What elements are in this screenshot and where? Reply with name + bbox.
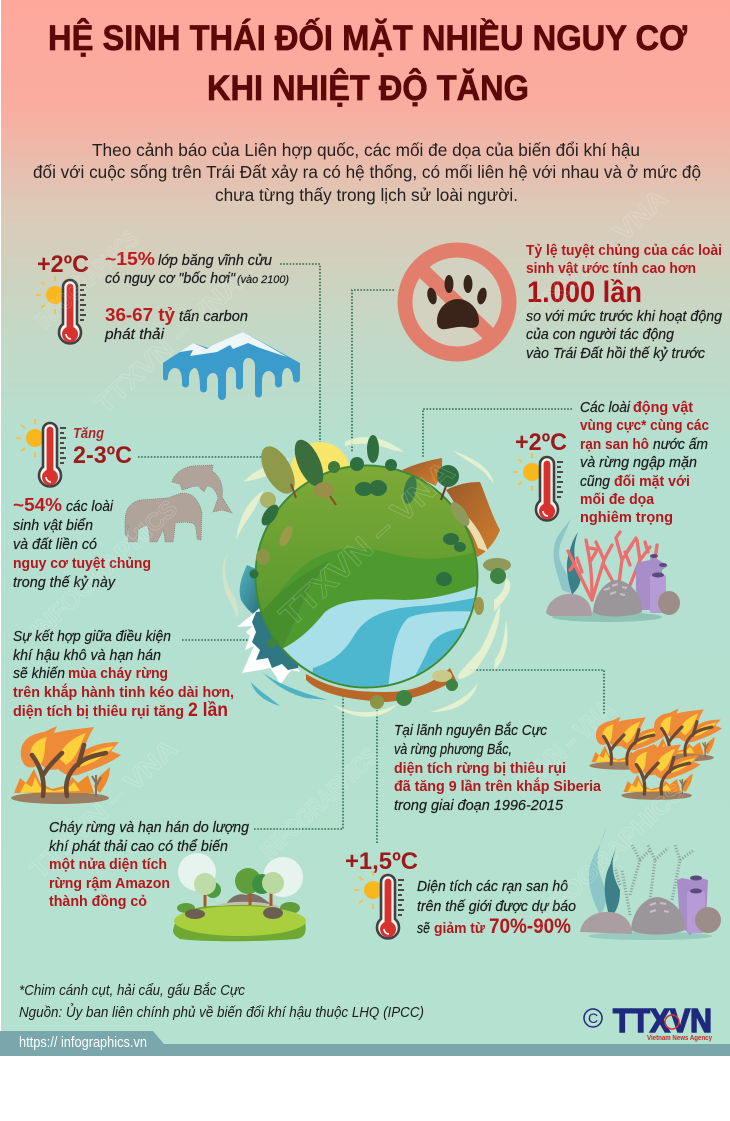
text: extinction rate: của con người tác động: [526, 327, 674, 343]
connector lines: [138, 264, 604, 843]
panel: species loss: [13, 419, 232, 591]
watermarks: TTXVN – VNA: [504, 694, 619, 804]
text: species loss: các loài: [66, 499, 114, 515]
heading: 2-3°C: Tăng: [73, 425, 104, 442]
text: polar species: nghiêm trọng: [580, 510, 673, 526]
panel: extinction rate: [405, 243, 722, 362]
text: Siberia: đã tăng 9 lần trên khắp Siberia: [394, 777, 602, 795]
panel: fire season: [11, 629, 234, 804]
heading: +1,5°C: +1,5ºC: [345, 848, 418, 875]
icon: thermometer: [36, 276, 86, 343]
watermarks: TTXVN – VNA: [272, 453, 461, 633]
text: species loss: ~54%: [13, 495, 62, 515]
text: extinction rate: so với mức trước khi hoạt động: [526, 309, 722, 325]
intro text: đối với cuộc sống trên Trái Đất xảy ra có hệ thống, có mối liên hệ với nhau và ở mức độ: [33, 162, 701, 182]
intro text: chưa từng thấy trong lịch sử loài người.: [215, 185, 518, 205]
illustration: coral reef: [546, 517, 680, 622]
icon: elephant: [125, 493, 202, 542]
title: [48, 18, 687, 108]
watermarks: TTXVN – VNA: [514, 183, 673, 334]
text: permafrost: [104, 249, 289, 343]
illustration: burning forest: [589, 709, 722, 800]
logo: TTXVN: [584, 1002, 712, 1042]
panel: coral decline: [345, 828, 721, 940]
text: Amazon: [49, 820, 249, 910]
heading: 2-3°C: [73, 425, 132, 469]
source: Nguồn: Ủy ban liên chính phủ về biến đổi khí hậu thuộc LHQ (IPCC): [19, 1003, 424, 1021]
watermarks: INFOGRAPHICS: [31, 226, 144, 334]
panel: Amazon: [49, 820, 306, 941]
text: coral decline: [417, 879, 576, 938]
text: species loss: trong thế kỷ này: [13, 575, 116, 591]
text: permafrost: (vào 2100): [237, 274, 289, 286]
cream swirls: [223, 437, 510, 717]
text: fire season: khí hậu khô và hạn hán: [13, 648, 161, 664]
text: extinction rate: vào Trái Đất hồi thế kỷ trước: [526, 346, 706, 362]
logo: TTXVN: TTXVN: [613, 1002, 712, 1039]
icon: dolphin: [172, 465, 232, 513]
icon: no-animal sign: [405, 250, 509, 354]
text: coral decline: Diện tích các rạn san hô: [417, 879, 568, 895]
intro text: Theo cảnh báo của Liên hợp quốc, các mối đe dọa của biến đổi khí hậu: [92, 140, 640, 160]
text: permafrost: tấn carbon: [179, 309, 248, 325]
text: permafrost: có nguy cơ "bốc hơi": [105, 271, 236, 287]
text: Siberia: [394, 722, 602, 814]
trees and shrubs: [250, 435, 511, 709]
footer bar: [0, 1031, 730, 1056]
text: species loss: nguy cơ tuyệt chủng: [13, 556, 151, 572]
text: extinction rate: Tỷ lệ tuyệt chủng của các loài: [526, 243, 722, 259]
text: Amazon: rừng rậm Amazon: [49, 876, 170, 892]
mountains: [402, 458, 500, 557]
text: fire season: [13, 629, 234, 721]
icon: melting mountain: [163, 332, 300, 400]
text: polar species: [580, 400, 709, 526]
watermarks: [24, 183, 690, 934]
icon: thermometer: [16, 419, 66, 486]
icon: thermometer: [513, 453, 563, 520]
text: polar species: Các loài: [580, 400, 631, 416]
text: fire season: diện tích bị thiêu rụi tăng: [13, 704, 184, 720]
text: fire season: Sự kết hợp giữa điều kiện: [13, 629, 171, 645]
text: polar species: cũng: [580, 474, 610, 490]
text: permafrost: 36-67 tỷ: [105, 305, 175, 325]
text: polar species: đối mặt với: [614, 474, 690, 490]
text: Amazon: Cháy rừng và hạn hán do lượng: [49, 820, 249, 836]
watermarks: TTXVN – VNA: [24, 733, 183, 884]
footnote: *Chim cánh cụt, hải cẩu, gấu Bắc Cực: [19, 982, 245, 999]
text: polar species: rạn san hô: [580, 437, 649, 453]
text: extinction rate: 1.000 lần: [527, 276, 642, 309]
text: permafrost: lớp băng vĩnh cửu: [158, 253, 272, 269]
text: species loss: và đất liền có: [13, 537, 97, 553]
intro text: [33, 140, 701, 205]
panel: permafrost: [36, 249, 300, 400]
panel: Siberia: [394, 709, 722, 814]
text: permafrost: ~15%: [105, 249, 155, 269]
text: fire season: mùa cháy rừng: [68, 666, 168, 682]
heading: 2-3°C: 2-3ºC: [73, 442, 132, 469]
text: fire season: 2 lần: [188, 700, 228, 721]
illustration: burning trees: [11, 726, 121, 804]
text: permafrost: phát thải: [104, 327, 165, 343]
planet surface: [256, 466, 476, 686]
illustration: globe: [223, 435, 511, 717]
text: polar species: mối đe dọa: [580, 492, 655, 508]
illustration: bleached coral: [580, 828, 721, 940]
watermarks: INFOGRAPHICS: [256, 742, 384, 864]
text: Siberia: Tại lãnh nguyên Bắc Cực: [394, 722, 548, 739]
text: Amazon: một nửa diện tích: [49, 857, 167, 873]
text: Siberia: diện tích rừng bị thiêu rụi: [394, 761, 566, 777]
watermarks: INFOGRAPHICS: [26, 495, 183, 644]
watermarks: INFOGRAPHICS: [526, 778, 690, 934]
text: coral decline: sẽ: [417, 921, 430, 937]
text: coral decline: trên thế giới được dự báo: [417, 899, 576, 915]
text: polar species: vùng cực* cùng các: [580, 418, 709, 434]
text: extinction rate: sinh vật ước tính cao hơn: [526, 261, 696, 277]
text: species loss: sinh vật biển: [13, 518, 93, 534]
snowy mountain: [237, 565, 328, 706]
text: fire season: sẽ khiến: [13, 666, 65, 682]
icon: thermometer: [354, 871, 404, 938]
sun: [290, 442, 350, 502]
text: polar species: động vật: [633, 400, 693, 416]
title: KHI NHIỆT ĐỘ TĂNG: [207, 68, 529, 108]
illustration: grassland: [173, 853, 306, 941]
text: coral decline: giảm từ: [434, 921, 485, 937]
text: Amazon: khí phát thải cao có thể biến: [49, 839, 228, 855]
text: extinction rate: [526, 243, 722, 362]
heading: +2°C: +2ºC: [37, 251, 89, 278]
heading: +2°C: +2ºC: [515, 429, 567, 456]
watermarks: TTXVN – VNA: [89, 268, 248, 419]
logo: TTXVN: Vietnam News Agency: [647, 1035, 712, 1042]
text: fire season: trên khắp hành tinh kéo dài hơn,: [13, 683, 234, 701]
title: HỆ SINH THÁI ĐỐI MẶT NHIỀU NGUY CƠ: [48, 18, 687, 58]
url: https:// infographics.vn: [19, 1034, 147, 1051]
text: coral decline: 70%-90%: [489, 915, 571, 938]
text: polar species: và rừng ngập mặn: [580, 455, 697, 471]
planet: [254, 464, 478, 688]
text: Amazon: thành đồng cỏ: [49, 894, 147, 910]
panel: polar species and reefs: [513, 400, 709, 622]
text: Siberia: và rừng phương Bắc,: [394, 741, 512, 758]
text: Siberia: trong giai đoạn 1996-2015: [394, 798, 564, 814]
text: species loss: [13, 495, 151, 591]
text: polar species: nước ấm: [653, 437, 708, 453]
logo: TTXVN: C: [588, 1010, 598, 1026]
